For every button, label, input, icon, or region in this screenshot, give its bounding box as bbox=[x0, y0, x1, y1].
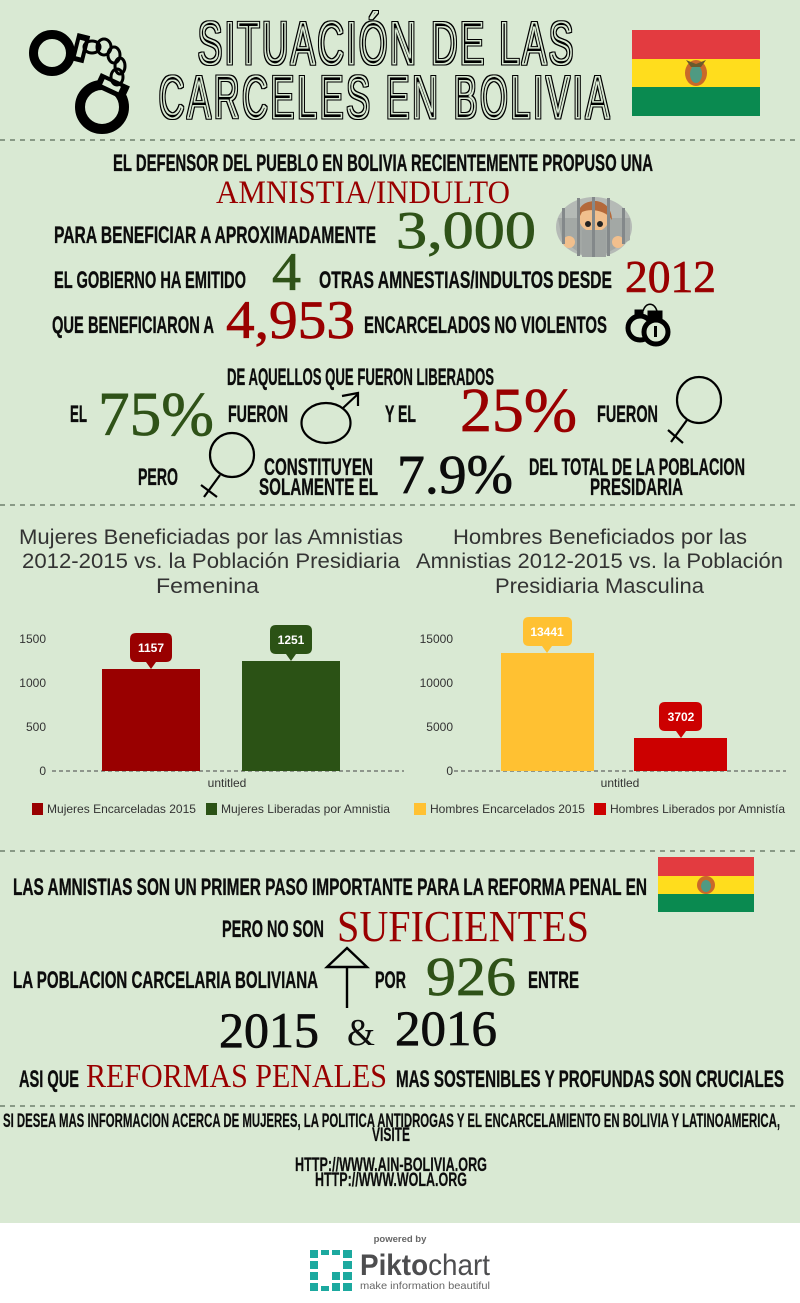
bar: 3702: 3702 bbox=[668, 710, 695, 724]
legend: hombres bbox=[414, 802, 785, 816]
title: CARCELES EN BOLIVIA bbox=[159, 65, 609, 131]
title: SITUACIÓN DE LAS bbox=[198, 11, 573, 77]
bar chart: mujeres: 0 bbox=[39, 764, 46, 778]
number: 4: 4 bbox=[272, 242, 301, 302]
chart title: hombres: Amnistias 2012-2015 vs. la Población bbox=[416, 549, 783, 573]
chart title: mujeres bbox=[19, 525, 403, 598]
text: para beneficiar: PARA BENEFICIAR A APROXIMADAMENTE bbox=[54, 222, 376, 249]
footer: piktochart: make information beautiful bbox=[360, 1280, 490, 1292]
bar chart: mujeres: 500 bbox=[26, 720, 46, 734]
chart title: mujeres: Femenina bbox=[156, 574, 259, 598]
icon: piktochart logo bbox=[310, 1250, 352, 1291]
highlight: reformas penales: REFORMAS PENALES bbox=[86, 1058, 387, 1095]
text: more information bbox=[3, 1111, 780, 1146]
bar chart: hombres: 5000 bbox=[426, 720, 453, 734]
chart title: mujeres: Mujeres Beneficiadas por las Amnistias bbox=[19, 525, 403, 549]
legend: hombres: Hombres Encarcelados 2015 bbox=[430, 802, 585, 816]
text: encarcelados: ENCARCELADOS NO VIOLENTOS bbox=[364, 312, 607, 339]
text: que beneficiaron: QUE BENEFICIARON A bbox=[52, 312, 214, 339]
arrow: up bbox=[327, 948, 367, 1008]
icon: female symbol left bbox=[201, 433, 254, 497]
chart title: mujeres: 2012-2015 vs. la Población Presidiaria bbox=[22, 549, 400, 573]
text: la poblacion: LA POBLACION CARCELARIA BOLIVIANA bbox=[13, 967, 318, 994]
footer: piktochart: powered by bbox=[374, 1234, 427, 1245]
icon: male symbol bbox=[302, 393, 358, 443]
footer: piktochart: Piktochart bbox=[360, 1249, 491, 1282]
bar: 13441: 13441 bbox=[530, 625, 564, 639]
bar chart: hombres: 0 bbox=[446, 764, 453, 778]
number: 926: 926 bbox=[426, 946, 516, 1007]
icon: Bolivia flag small bbox=[658, 857, 754, 912]
icon: small handcuffs bbox=[628, 304, 668, 344]
text: more information: VISITE bbox=[372, 1125, 410, 1146]
text: fueron: FUERON bbox=[597, 401, 658, 428]
text: el: EL bbox=[70, 401, 87, 428]
text: constituyen: CONSTITUYEN bbox=[264, 454, 373, 481]
text: links: HTTP://WWW.WOLA.ORG bbox=[315, 1170, 467, 1191]
chart title: hombres: Hombres Beneficiados por las bbox=[453, 525, 747, 549]
bar: 3702 bbox=[634, 702, 727, 771]
number: 7.9%: 7.9% bbox=[397, 444, 513, 505]
chart title: hombres bbox=[416, 525, 783, 598]
icon: large handcuffs bbox=[34, 33, 130, 129]
text: links bbox=[295, 1155, 487, 1191]
number: 2012: 2012 bbox=[625, 252, 716, 302]
text: del total: PRESIDARIA bbox=[590, 474, 683, 501]
legend: mujeres bbox=[32, 802, 390, 816]
bar: 1157 bbox=[102, 633, 200, 771]
text: constituyen: SOLAMENTE EL bbox=[259, 474, 378, 501]
bar: 1157: 1157 bbox=[138, 641, 164, 655]
chart title: hombres: Presidiaria Masculina bbox=[495, 574, 704, 598]
text: el gobierno: EL GOBIERNO HA EMITIDO bbox=[54, 267, 246, 294]
highlight: suficientes: SUFICIENTES bbox=[337, 902, 589, 951]
symbol: ampersand: & bbox=[347, 1012, 375, 1054]
text: otras amnestias: OTRAS AMNESTIAS/INDULTOS DESDE bbox=[319, 267, 612, 294]
number: 2015: 2015 bbox=[219, 1002, 319, 1058]
bar chart: mujeres: 1000 bbox=[19, 676, 46, 690]
icon: prisoner bbox=[556, 197, 632, 257]
highlight: amnistia: AMNISTIA/INDULTO bbox=[216, 175, 510, 211]
divider bbox=[0, 504, 800, 506]
legend: mujeres: Mujeres Liberadas por Amnistia bbox=[221, 802, 390, 816]
text: del total bbox=[529, 454, 745, 501]
bar: 13441 bbox=[501, 617, 594, 771]
legend: mujeres: Mujeres Encarceladas 2015 bbox=[47, 802, 196, 816]
text: pero no son: PERO NO SON bbox=[222, 916, 324, 943]
bar chart: hombres: untitled bbox=[601, 776, 639, 790]
bar chart: hombres bbox=[414, 617, 786, 816]
bar chart: mujeres: 1500 bbox=[19, 632, 46, 646]
number: 4,953: 4,953 bbox=[226, 290, 355, 350]
divider bbox=[0, 1105, 800, 1107]
text: fueron: FUERON bbox=[228, 401, 288, 428]
bar chart: hombres: 15000 bbox=[420, 632, 453, 646]
title bbox=[159, 11, 609, 131]
divider bbox=[0, 850, 800, 852]
number: 75%: 75% bbox=[98, 381, 214, 449]
text: pero: PERO bbox=[138, 464, 178, 491]
text: de aquellos: DE AQUELLOS QUE FUERON LIBERADOS bbox=[227, 364, 494, 391]
text: asi que: ASI QUE bbox=[19, 1066, 79, 1093]
divider bbox=[0, 139, 800, 141]
text: constituyen bbox=[259, 454, 378, 501]
text: links: HTTP://WWW.AIN-BOLIVIA.ORG bbox=[295, 1155, 487, 1176]
text: entre: ENTRE bbox=[528, 967, 579, 994]
number: 3,000: 3,000 bbox=[396, 202, 536, 260]
bar chart: mujeres bbox=[19, 625, 404, 816]
bar: 1251 bbox=[242, 625, 340, 771]
bar chart: hombres: 10000 bbox=[420, 676, 453, 690]
icon: female symbol right bbox=[668, 377, 721, 443]
footer: piktochart bbox=[0, 1223, 800, 1303]
bar: 1251: 1251 bbox=[278, 633, 305, 647]
number: 25%: 25% bbox=[460, 377, 577, 445]
bar chart: mujeres: untitled bbox=[208, 776, 246, 790]
text: y el: Y EL bbox=[385, 401, 416, 428]
legend: hombres: Hombres Liberados por Amnistía bbox=[610, 802, 785, 816]
icon: Bolivia flag large bbox=[632, 30, 760, 116]
number: 2016: 2016 bbox=[395, 1000, 497, 1056]
text: por: POR bbox=[375, 967, 406, 994]
